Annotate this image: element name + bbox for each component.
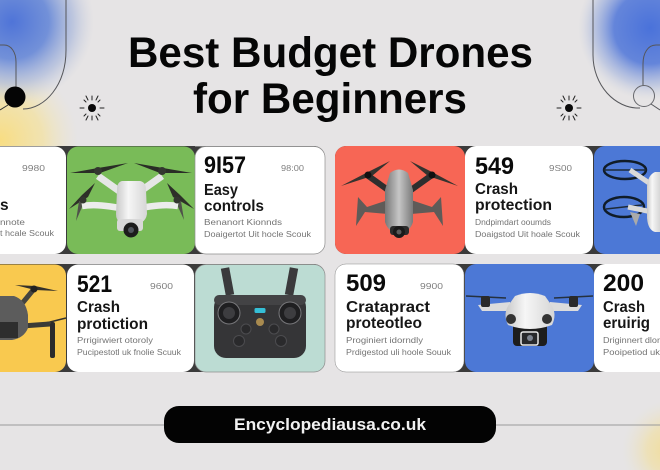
card: Crash protiction: Crash [77, 299, 120, 316]
drone: white folding drone [69, 163, 194, 238]
decoration: bottom-right glow [615, 395, 660, 470]
drone: gray folding drone [341, 161, 458, 238]
card: Cratapract proteotleo: Cratapract [346, 299, 430, 316]
card: Cratapract proteotleo: Prdigestod uli hoole Souuk [346, 348, 452, 357]
card: partly cropped product: s [0, 197, 9, 214]
card: Crash protiction [67, 264, 194, 372]
card: Crash eruirig, cropped: 200 [603, 270, 644, 297]
card: Cratapract proteotleo: 509 [346, 270, 386, 297]
card: Cratapract proteotleo: 9900 [420, 281, 443, 291]
footer: connecting line [0, 424, 660, 426]
drone: white front-view drone [466, 293, 593, 346]
card: Crash protection: 9S00 [549, 163, 572, 173]
panel: green drone image [67, 146, 195, 254]
decoration: top-right gradient corner [575, 0, 660, 110]
card: Crash protiction: Pucipestotl uk fnolie Scuuk [77, 348, 182, 357]
title: Best Budget Drones [128, 29, 533, 77]
panel: row 2 left group [0, 264, 325, 372]
panel: yellow drone image, cropped [0, 264, 66, 372]
drone: prop guard drone [604, 161, 660, 232]
panel: blue drone image, cropped [594, 146, 660, 254]
panel: mint controller image [195, 264, 325, 372]
card: Crash protection [465, 146, 593, 254]
card: partly cropped product [0, 146, 66, 254]
card: partly cropped product: 9980 [22, 163, 45, 173]
card: Easy controls: controls [204, 198, 264, 215]
card: Crash protection: Doaigstod Uit hoale Scouk [475, 230, 581, 239]
card: Crash protiction: protiction [77, 316, 148, 333]
card: Easy controls: Doaigertot Uit hocle Scouk [204, 230, 312, 239]
card: Easy controls: Benanort Kionnds [204, 218, 282, 227]
card: Crash eruirig, cropped: eruirig [603, 315, 650, 332]
card: partly cropped product: nnote [0, 218, 26, 227]
drone: dark folding drone [0, 285, 66, 358]
card: Crash eruirig, cropped: Driginnert dlor [603, 336, 660, 345]
card: Crash protiction: Prrigirwiert otoroly [77, 336, 153, 345]
card: Crash protection: protection [475, 197, 552, 214]
title: for Beginners [193, 75, 467, 123]
card: Cratapract proteotleo: proteotleo [346, 315, 422, 332]
panel: red drone image [335, 146, 465, 254]
icon: right sun [557, 96, 581, 120]
card: Easy controls: 98:00 [281, 163, 304, 173]
panel: blue front-view drone image [465, 264, 594, 372]
card: Crash protection: 549 [475, 153, 514, 180]
panel: row 1 left group [0, 146, 325, 254]
footer: website pill: Encyclopediausa.co.uk [234, 416, 427, 434]
card: Cratapract proteotleo [335, 264, 464, 372]
panel: row 1 right group [335, 146, 660, 254]
decoration: top-left gradient corner [0, 0, 96, 146]
title [128, 29, 533, 123]
card: Crash protection: Crash [475, 181, 518, 198]
card: Cratapract proteotleo: Proginiert idorndly [346, 336, 423, 345]
icon: left sun [80, 96, 104, 120]
panel: row 2 right group [335, 264, 660, 372]
icon: remote controller [214, 268, 306, 358]
card: Easy controls: Easy [204, 182, 238, 199]
footer: website pill [164, 406, 496, 443]
card: Crash eruirig, cropped: Crash [603, 299, 645, 316]
card: partly cropped product: t hcale Scouk [0, 229, 55, 238]
card: Crash protection: Dndpimdart ooumds [475, 218, 551, 227]
card: Crash protiction: 521 [77, 271, 112, 298]
card: Crash eruirig, cropped: Pooipetiod uk [603, 348, 660, 357]
card: Crash protiction: 9600 [150, 281, 173, 291]
card: Easy controls [195, 146, 325, 254]
card: Easy controls: 9I57 [204, 152, 246, 179]
card: Crash eruirig, cropped [594, 264, 660, 372]
